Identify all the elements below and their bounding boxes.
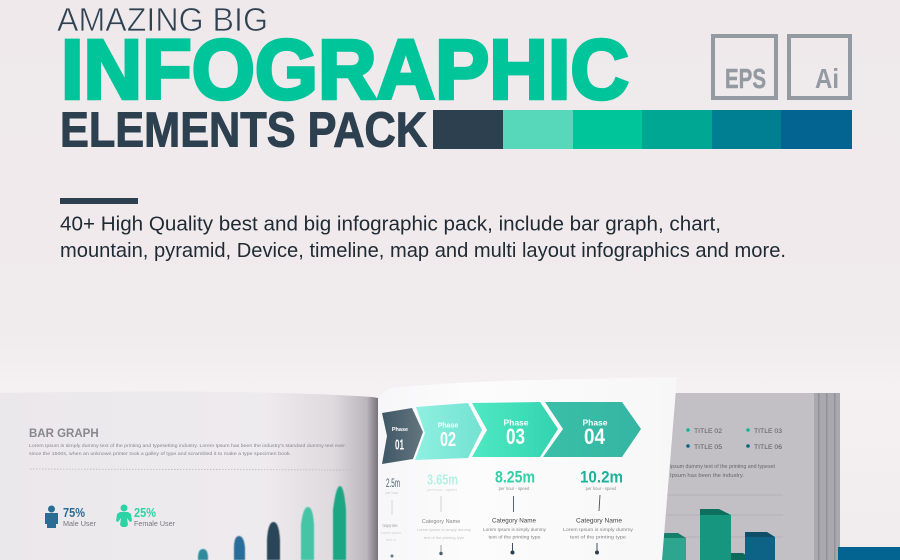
- lorem text: since the 1500s, when an unknown printer took a galley of type and scrambled it to make a type specimen book.: [29, 451, 291, 456]
- stat: female user: 25%: [134, 506, 156, 520]
- stat column 1: [381, 476, 401, 558]
- panel: left page: [0, 392, 378, 560]
- colour palette bar: [433, 110, 852, 149]
- arrow: phase 04: 04: [584, 424, 606, 449]
- stat column 1: Category Name: [382, 523, 398, 528]
- stat: female user: [116, 504, 176, 528]
- heading: bar graph: BAR GRAPH: [29, 428, 99, 440]
- icon: EPS file badge: EPS: [725, 63, 766, 94]
- stat column 4: per hour - speed: [586, 486, 617, 491]
- arrow: phase 02: [415, 403, 482, 460]
- arrow: phase 03: 03: [506, 424, 525, 449]
- legend titles: TITLE 05: [694, 444, 722, 451]
- brochure: back stack pages: [813, 393, 840, 560]
- arrow: phase 03: Phase: [503, 418, 529, 428]
- stat column 4: Lorem Ipsum is simply dummy: [563, 527, 634, 532]
- title: amazing big: AMAZING BIG: [57, 2, 268, 39]
- stat: male user: Male User: [63, 521, 97, 528]
- arrow: phase 01: [382, 408, 423, 464]
- panel: back page: [640, 393, 814, 560]
- stat column 1: 2.5m: [386, 476, 400, 490]
- stat column 1: text of: [386, 538, 396, 542]
- bar chart: [198, 486, 346, 560]
- stat column 2: per hour - speed: [427, 487, 457, 492]
- 3d bar chart: [660, 509, 775, 560]
- lorem text: [29, 443, 346, 456]
- legend titles: TITLE 02: [694, 428, 722, 435]
- legend titles: TITLE 06: [754, 444, 782, 451]
- arrow: phase 01: Phase: [392, 427, 408, 433]
- arrow: phase 02: 02: [440, 429, 456, 451]
- stat column 4: Category Name: [576, 518, 622, 524]
- legend titles: TITLE 03: [754, 428, 782, 435]
- stat column 3: 8.25m: [495, 468, 535, 486]
- stat column 4: 10.2m: [580, 468, 623, 486]
- stat column 2: Lorem Ipsum is simply dummy: [417, 527, 471, 532]
- description text: [60, 214, 786, 262]
- stat column 2: [417, 472, 471, 555]
- arrow: phase 01: 01: [395, 436, 404, 454]
- corner blue block: [838, 547, 900, 560]
- icon: EPS file badge: [713, 36, 776, 98]
- panel: right page: [378, 377, 677, 560]
- arrow: phase 04: [543, 402, 641, 457]
- stat column 4: [563, 468, 634, 554]
- description text: mountain, pyramid, Device, timeline, map and multi layout infographics and more.: [60, 240, 786, 262]
- back page text: Ipsum has been the industry.: [670, 473, 744, 479]
- stat column 3: per hour - speed: [499, 486, 530, 491]
- icon: Ai file badge: Ai: [815, 63, 839, 94]
- arrow: phase 02: Phase: [438, 422, 458, 430]
- arrow: phase 03: [472, 402, 558, 457]
- stat column 4: text of the printing type: [570, 534, 627, 540]
- back page text: [670, 464, 776, 479]
- stat: male user: [45, 506, 97, 528]
- lorem text: Lorem Ipsum is simply dummy text of the printing and typesetting industry. Lorem Ipsum has been the industry's standard dummy text ever: [29, 443, 346, 448]
- stat: male user: 75%: [63, 506, 85, 520]
- stat column 2: text of the printing type: [424, 535, 465, 540]
- arrow: phase 04: Phase: [582, 418, 608, 428]
- stat column 1: per hour: [385, 491, 399, 495]
- title: infographic: INFOGRAPHIC: [61, 22, 629, 116]
- stat column 2: 3.65m: [427, 472, 458, 488]
- stat column 2: Category Name: [422, 519, 460, 525]
- stat column 3: text of the printing type: [488, 534, 541, 540]
- back page text: ipsum dummy text of the printing and typeset: [670, 464, 776, 470]
- stat column 1: Lorem Ipsum: [381, 531, 401, 535]
- icon: Ai file badge: [789, 36, 850, 98]
- stat: female user: Female User: [134, 521, 176, 528]
- stat column 3: Category Name: [492, 518, 536, 524]
- legend titles: [686, 428, 782, 451]
- description text: 40+ High Quality best and big infographic pack, include bar graph, chart,: [60, 214, 721, 236]
- stat column 3: Lorem Ipsum is simply dummy: [483, 527, 547, 532]
- accent rule: [60, 198, 138, 204]
- title: elements pack: ELEMENTS PACK: [60, 104, 427, 158]
- stat column 3: [483, 468, 547, 554]
